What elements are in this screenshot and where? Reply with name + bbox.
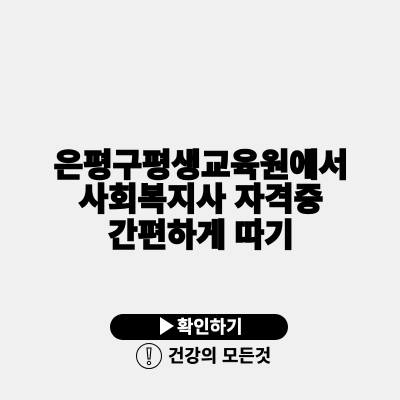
title: 은평구평생교육원에서 (54, 147, 348, 183)
icon: play triangle (160, 317, 174, 335)
title (54, 147, 348, 253)
icon: exclamation circle (136, 343, 162, 369)
brand name: 건강의 모든것 (168, 346, 271, 366)
button: confirm (110, 314, 288, 340)
button label: 확인하기 (177, 317, 242, 337)
title: 간편하게 따기 (108, 217, 294, 253)
title: 사회복지사 자격증 (79, 181, 323, 217)
